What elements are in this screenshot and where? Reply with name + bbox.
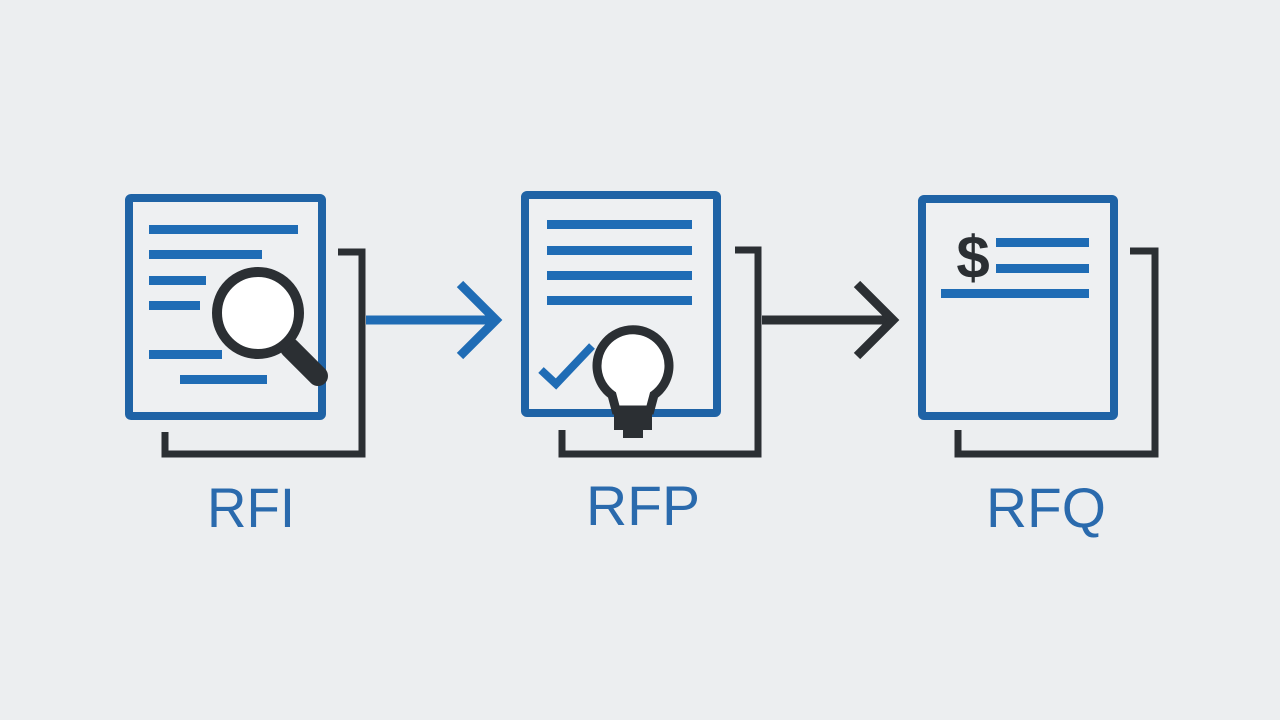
icon: magnifier xyxy=(217,272,318,376)
icon: RFI document xyxy=(129,198,362,454)
icon: checkmark xyxy=(541,346,592,384)
label: RFP: RFP xyxy=(586,474,700,537)
icon: RFQ document xyxy=(922,199,1155,454)
icon: dollar sign: $ xyxy=(956,224,990,291)
icon: RFP document xyxy=(525,195,758,454)
label: RFQ: RFQ xyxy=(986,476,1106,539)
arrow: RFI to RFP xyxy=(366,284,496,356)
label: RFI: RFI xyxy=(207,476,295,539)
icon: lightbulb xyxy=(597,330,669,438)
arrow: RFP to RFQ xyxy=(762,284,893,356)
